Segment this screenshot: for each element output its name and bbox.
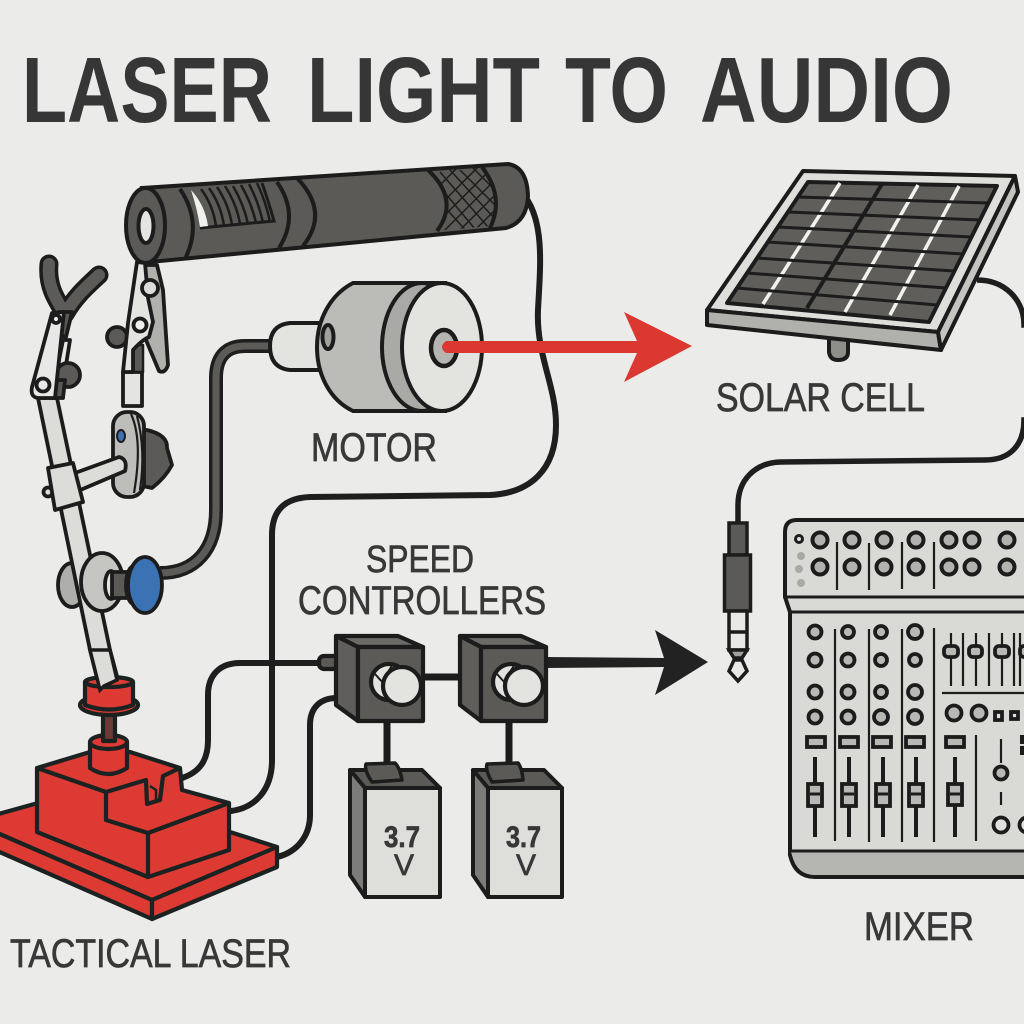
- mixer body: [785, 520, 1024, 877]
- alligator clip: [123, 262, 168, 372]
- rod block: [44, 463, 83, 510]
- battery label: 3.7: [506, 821, 541, 854]
- cell panel: [727, 182, 997, 322]
- fader tracks: [815, 757, 955, 837]
- knob: [493, 664, 543, 705]
- clamp knob: [53, 363, 80, 398]
- title: LASER: [22, 38, 272, 142]
- battery 1: [350, 763, 440, 897]
- back washer: [58, 563, 86, 607]
- red laser arrow: [442, 312, 692, 382]
- cross bar: [72, 457, 126, 491]
- mixer front lip: [791, 852, 1024, 875]
- battery 2: [473, 763, 562, 897]
- blue knob: [126, 557, 162, 613]
- cable: motor to blue knob: [160, 346, 272, 573]
- tactical laser base: [0, 677, 277, 919]
- cable: laser to base: [231, 198, 556, 811]
- battery label: [384, 821, 420, 882]
- oval mount plate: [113, 412, 144, 497]
- arm rod end: [90, 650, 117, 690]
- title: AUDIO: [700, 38, 953, 142]
- motor hub: [431, 330, 457, 366]
- solar cell: [707, 171, 1018, 360]
- label: motor: MOTOR: [311, 426, 437, 470]
- label: speed controllers: CONTROLLERS: [298, 579, 546, 623]
- arm rod: [38, 398, 118, 690]
- stand peg: [829, 338, 848, 360]
- title: LIGHT: [307, 38, 540, 142]
- cable: base plate to speed controller: [277, 698, 337, 857]
- motor face: [402, 283, 482, 411]
- label: mixer: MIXER: [864, 905, 974, 949]
- cable: solar cell to jack: [738, 280, 1024, 525]
- speed controller 2: [460, 636, 546, 721]
- frame: [707, 171, 1015, 332]
- mixer: [785, 520, 1024, 877]
- battery label: [506, 821, 541, 882]
- top knob rows: [812, 532, 1014, 574]
- fork clip: [49, 264, 99, 365]
- side block: [1020, 735, 1024, 755]
- flange: [80, 677, 138, 715]
- base plate: [0, 803, 277, 900]
- master sliders: [951, 633, 1020, 686]
- fader thumbs: [808, 784, 962, 806]
- motor: [270, 283, 482, 411]
- dark ball: [107, 327, 127, 347]
- knob shaft: [112, 572, 134, 598]
- front washer: [81, 553, 123, 611]
- title: [22, 38, 953, 142]
- collar: [90, 735, 127, 774]
- rear knob: [138, 430, 172, 488]
- channel knobs: [808, 625, 922, 724]
- battery label: V: [394, 849, 414, 882]
- title: TO: [565, 38, 668, 142]
- laser pointer: [126, 164, 528, 263]
- status lights: [794, 534, 805, 587]
- battery label: 3.7: [384, 821, 420, 854]
- motor connector: [270, 323, 322, 370]
- label: speed controllers: [298, 539, 546, 623]
- speed controller 1: [319, 636, 423, 721]
- housing: [37, 752, 229, 877]
- audio jack: [724, 523, 750, 681]
- label: solar cell: SOLAR CELL: [716, 376, 925, 420]
- knob: [371, 664, 421, 705]
- battery label: V: [516, 849, 536, 882]
- label: speed controllers: SPEED: [366, 539, 474, 581]
- black output arrow: [546, 630, 708, 695]
- master knobs: [946, 706, 1024, 832]
- label: tactical laser: TACTICAL LASER: [10, 932, 291, 976]
- plug: [319, 656, 342, 669]
- clip handle: [123, 372, 142, 406]
- clamp plate: [32, 312, 64, 398]
- motor body: [317, 283, 445, 411]
- post: [103, 712, 115, 741]
- channel buttons: [807, 737, 964, 747]
- speed controller wires: [387, 677, 509, 765]
- adjustable arm stand: [32, 262, 172, 690]
- cable: base to speed controller: [182, 663, 320, 778]
